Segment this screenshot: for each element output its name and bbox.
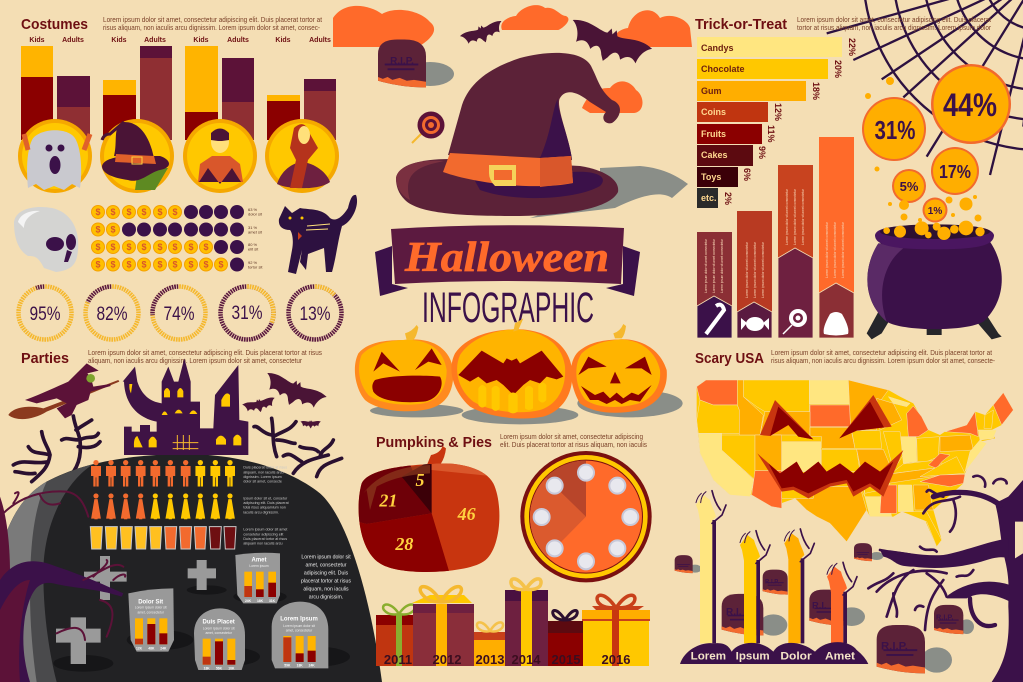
party notes: Duis placerat tortor at risus	[243, 466, 287, 470]
column: candy cane: Lorem ipsum dolor sit amet consectetur	[712, 238, 716, 293]
year labels: 2012	[433, 652, 461, 667]
bar chart: candy: 11%	[766, 125, 776, 143]
donut charts: percentages: 13%	[300, 304, 331, 325]
column: lollipop	[778, 165, 813, 338]
gravestone chart: duis placet: Lorem ipsum dolor sit	[203, 626, 235, 630]
icon: black cat	[279, 195, 357, 274]
pumpkin: grin	[571, 324, 667, 413]
pumpkins description: elit. Duis placerat tortor at risus aliquam, non iaculis	[500, 440, 647, 449]
parties description: aliquam, non iaculis arcu dignissim. Lorem ipsum dolor sit amet, consectetur	[88, 356, 303, 365]
bar chart: candy: Gum	[701, 86, 722, 96]
icon chart: coin rows	[92, 205, 263, 272]
gravestone chart: dolor sit: 48K	[148, 647, 155, 651]
party notes: aliquam non iaculis arcu	[243, 542, 283, 546]
clouds	[333, 5, 692, 113]
pumpkins description	[500, 432, 647, 449]
icon chart: coin rows: $	[188, 260, 194, 270]
pie chart: pumpkin: 21	[378, 491, 397, 511]
bar chart: candy: 22%	[847, 38, 857, 56]
gravestone chart: duis placet: 56K	[216, 667, 223, 671]
gravestone chart: lorem ipsum	[272, 602, 328, 668]
icon: tombstones: R.I.	[812, 600, 827, 610]
bar chart: kids vs adults: Kids	[29, 37, 45, 44]
party notes: dolor sit amet, consecte	[243, 480, 282, 484]
icon chart: coin rows: $	[218, 260, 224, 270]
panel: pumpkins and pies	[350, 432, 652, 667]
year labels: 2013	[476, 652, 504, 667]
bar chart: candy: 18%	[811, 82, 821, 100]
icon chart: coin rows: $	[172, 260, 178, 270]
bar chart: candy: 20%	[833, 60, 843, 78]
bar chart: kids vs adults: Kids	[275, 37, 291, 44]
icon chart: women	[91, 493, 235, 519]
bar chart: candy: 2%	[723, 192, 733, 205]
heading: pumpkins and pies: Pumpkins & Pies	[376, 434, 492, 451]
icon chart: coin rows: dolor sit	[248, 212, 263, 216]
title: Halloween: Halloween	[404, 235, 609, 281]
labels: lorem ipsum dolor amet	[680, 642, 868, 664]
bubble: 5%	[892, 169, 926, 203]
party notes: consetetur adipiscing elit	[243, 532, 283, 536]
pie chart: pumpkin: 46	[457, 504, 476, 524]
icon chart: coin rows: $	[95, 260, 101, 270]
bar chart: candy: Cakes	[701, 150, 728, 160]
castle windows	[129, 384, 241, 450]
pie chart: pumpkin: 28	[394, 534, 413, 554]
centred note: adipiscing elit. Duis	[304, 570, 348, 576]
party notes: Ipsum dolor sit et, consetur	[243, 496, 288, 500]
icon chart: coin rows: $	[95, 242, 101, 252]
gravestone chart: lorem ipsum: 18K	[297, 663, 303, 667]
party notes: total risus aliquamlum non	[243, 506, 286, 510]
labels: lorem ipsum dolor amet: Dolor	[780, 650, 812, 662]
pie chart: pumpkin	[358, 446, 500, 572]
bubble: 1%	[922, 198, 948, 222]
bubble: 44%	[931, 64, 1011, 144]
trick-or-treat description: tortor at risus aliquam, non iaculis arcu dignissim. Lorem ipsum dolor	[797, 23, 992, 32]
year labels: 2015	[552, 652, 580, 667]
gift 2011	[376, 604, 426, 666]
column: cake: Lorem ipsum dolor sit amet consectetur	[825, 221, 829, 278]
gravestone chart: dolor sit: 24K	[160, 647, 167, 651]
icon chart: coin rows: $	[110, 207, 116, 217]
icon: ghost	[18, 119, 92, 193]
party notes	[243, 466, 289, 546]
donut charts: percentages: 95%	[30, 304, 61, 325]
icon chart: coin rows: $	[95, 224, 101, 234]
column: wrapped candy	[737, 211, 772, 338]
subtitle: infographic: INFOGRAPHIC	[422, 284, 594, 332]
trick-or-treat description: Lorem ipsum dolor sit amet, consectetur adipiscing elit. Duis placerat	[797, 15, 991, 24]
title banner	[375, 225, 640, 296]
scary USA description	[771, 348, 996, 365]
centred note: arcu dignissim.	[309, 594, 343, 600]
gifts by year	[376, 579, 650, 667]
column: candy cane: Lorem ipsum dolor sit amet consectetur	[704, 238, 708, 293]
gravestone chart: amet: Amet	[252, 558, 266, 564]
bar chart: candy: etc.	[701, 193, 717, 203]
icon chart: coin rows: $	[141, 207, 147, 217]
column: cake: Lorem ipsum dolor sit amet consectetur	[841, 221, 845, 278]
column: candy cane	[697, 232, 732, 338]
bubble: 17%	[931, 147, 979, 195]
heading: parties: Parties	[21, 350, 69, 367]
pumpkins description: Lorem ipsum dolor sit amet, consectetur adipiscing	[500, 432, 643, 441]
icon chart: coin rows: 80 %	[248, 242, 258, 247]
icon chart: coin rows: 63 %	[248, 207, 258, 212]
icon: pumpkins	[355, 318, 683, 424]
gravestone chart: lorem ipsum: Lorem Ipsum	[280, 616, 318, 622]
trick-or-treat description	[797, 15, 992, 32]
bar chart: kids vs adults: Adults	[309, 37, 331, 44]
icon chart: coin rows: elit sit	[248, 246, 259, 252]
icon chart: coin rows: $	[110, 242, 116, 252]
icon chart: coin rows: $	[188, 242, 194, 252]
heading: costumes: Costumes	[21, 16, 88, 33]
gravestone chart: dolor sit	[128, 588, 174, 652]
costumes description	[103, 15, 322, 32]
icon chart: coin rows: $	[141, 260, 147, 270]
icon: tombstone	[378, 40, 454, 88]
gravestone chart: amet: Lorem ipsum	[249, 564, 269, 568]
parties description: Lorem ipsum dolor sit amet, consectetur adipiscing elit. Duis placerat tortor at risus	[88, 348, 322, 357]
gravestone crosses	[56, 556, 216, 664]
bar chart: candy: Fruits	[701, 129, 726, 139]
pumpkin: angry	[355, 325, 453, 411]
bar chart: candy: Toys	[701, 172, 721, 182]
gift 2016	[582, 595, 650, 666]
icon: cauldron	[867, 221, 1002, 339]
icon: gnarled tree	[868, 476, 1023, 682]
icon: witch	[100, 119, 174, 193]
gift 2015	[548, 610, 583, 666]
icon: foreground tree	[0, 491, 125, 682]
bubble: 31%	[862, 97, 926, 161]
bar chart: kids vs adults: Adults	[144, 37, 166, 44]
icon chart: coin rows: 92 %	[248, 260, 258, 265]
gravestone chart: amet: 24K	[245, 599, 252, 603]
column: cake: Lorem ipsum dolor sit amet consectetur	[833, 221, 837, 278]
gravestone shadows	[53, 585, 350, 672]
icon: tombstones: R.I.P.	[881, 640, 908, 652]
gravestone chart: amet: 18K	[257, 599, 264, 603]
column: wrapped candy: Lorem ipsum dolor sit amet consectetur	[753, 241, 757, 298]
panel: title and hat	[333, 5, 692, 424]
bar chart: kids vs adults: Kids	[111, 37, 127, 44]
bar chart: kids vs adults: Adults	[227, 37, 249, 44]
bar chart: candy: Chocolate	[701, 64, 745, 74]
year labels	[384, 652, 630, 667]
donut charts: percentages: 74%	[164, 304, 195, 325]
icon chart: coin rows: $	[110, 260, 116, 270]
icon: tombstones	[675, 543, 974, 673]
icon: skull	[14, 207, 78, 272]
centred note	[301, 554, 351, 600]
gravestone chart: duis placet: 18K	[204, 667, 210, 671]
panel: trick-or-treat	[695, 0, 1023, 339]
parties description	[88, 348, 322, 365]
labels: lorem ipsum dolor amet: Ipsum	[736, 650, 770, 662]
icon: lollipop	[412, 112, 444, 143]
icon chart: coin rows: $	[157, 242, 163, 252]
party notes: Lorem ipsum dolor sit amet	[243, 528, 287, 532]
bubble: 44%: 44%	[943, 87, 997, 123]
pie chart: pumpkin: 5	[415, 470, 424, 490]
pumpkin: bat face	[451, 318, 572, 418]
icon: masked hero	[183, 119, 257, 193]
bar chart: candy: Coins	[701, 107, 726, 117]
party notes: dignissim. Lorem ipsum	[243, 475, 282, 479]
icon chart: coin rows: $	[95, 207, 101, 217]
year labels: 2014	[512, 652, 541, 667]
party notes: Duis placerat tortor at risus	[243, 537, 287, 541]
column: wrapped candy: Lorem ipsum dolor sit amet consectetur	[761, 241, 765, 298]
gravestone chart: lorem ipsum: Lorem ipsum dolor sit	[283, 624, 315, 628]
small potion bubbles	[865, 77, 982, 222]
heading: trick-or-treat: Trick-or-Treat	[695, 16, 787, 33]
gravestone chart: duis placet: Duis Placet	[203, 620, 235, 626]
column: wrapped candy: Lorem ipsum dolor sit amet consectetur	[745, 241, 749, 298]
icon chart: coin rows: $	[203, 242, 209, 252]
icon: castle	[123, 358, 248, 455]
centred note: aliquam, non iaculis	[303, 586, 349, 592]
heading: scary USA: Scary USA	[695, 350, 764, 367]
hill and party scene	[0, 358, 382, 682]
icon chart: coin rows: $	[126, 207, 132, 217]
bar chart: candy: 6%	[742, 168, 752, 181]
centred note: placerat tortor at risus	[301, 578, 351, 584]
hill	[0, 454, 382, 682]
spider web	[827, 0, 1023, 175]
panel: parties	[0, 348, 382, 682]
party notes: aliquam, non iaculis arcu	[243, 470, 284, 474]
icon chart: coin rows: $	[172, 242, 178, 252]
map of USA with pumpkin face	[697, 380, 1013, 547]
donut charts: percentages	[18, 286, 342, 340]
icon: bats in sky	[459, 15, 654, 75]
bar chart: kids vs adults: Kids	[193, 37, 209, 44]
party notes: adipiscing elit. Duis placerat	[243, 501, 289, 505]
costumes description: Lorem ipsum dolor sit amet, consectetur adipiscing elit. Duis placerat tortor at	[103, 15, 322, 24]
donut charts: percentages: 82%	[96, 304, 128, 325]
gravestone chart: lorem ipsum: 59K	[284, 663, 291, 667]
centred note: Lorem ipsum dolor sit	[301, 554, 351, 560]
icon chart: coin rows: $	[157, 207, 163, 217]
icon: tombstones: R.I.P.	[765, 579, 780, 585]
panel: costumes	[14, 15, 357, 340]
column: lollipop: Lorem ipsum dolor sit amet consectetur	[785, 188, 789, 245]
bubble: 5%: 5%	[900, 179, 919, 194]
year labels: 2016	[602, 652, 630, 667]
icon chart: drinks	[90, 527, 236, 549]
icon: zombie hands	[696, 491, 857, 643]
column: candy cane: Lorem ipsum dolor sit amet consectetur	[720, 238, 724, 293]
icon: witch hat	[396, 53, 688, 218]
gravestone chart: amet	[235, 553, 280, 603]
icon chart: men	[91, 460, 235, 487]
labels: lorem ipsum dolor amet: Amet	[825, 650, 855, 662]
column: cake	[819, 137, 854, 338]
icon chart: coin rows: $	[126, 260, 132, 270]
gravestone chart: lorem ipsum: 24K	[309, 663, 315, 667]
icon chart: coin rows: $	[203, 260, 209, 270]
bubble: 31%: 31%	[874, 115, 916, 145]
centred note: amet, consectetur	[306, 562, 347, 568]
icon chart: coin rows: tortor sit	[248, 264, 263, 270]
gravestone chart: lorem ipsum: amet, consectetur	[286, 629, 313, 633]
panel: scary USA	[675, 348, 1023, 682]
scary USA description: risus aliquam, non iaculis arcu dignissim. Lorem ipsum dolor sit amet, consecte-	[771, 356, 996, 365]
icon: tombstones: R.I.	[726, 607, 742, 618]
gravestone chart: dolor sit: amet, consectetur	[137, 610, 165, 614]
gravestone chart: dolor sit: 12K	[136, 647, 143, 651]
icon: bare trees	[13, 416, 342, 482]
icon chart: coin rows: 31 %	[248, 225, 258, 230]
costumes description: risus aliquam, non iaculis arcu dignissim. Lorem ipsum dolor sit amet, consec-	[103, 23, 321, 32]
icon chart: coin rows: $	[157, 260, 163, 270]
icon chart: coin rows: $	[172, 207, 178, 217]
icon: tombstones: R.I.P.	[936, 612, 953, 621]
gravestone chart: duis placet: amet, consectetur	[205, 631, 233, 635]
bubble: 1%: 1%	[928, 206, 942, 217]
bar chart: kids vs adults	[21, 37, 336, 140]
bubble: 17%: 17%	[939, 162, 971, 182]
icon: witch on broom	[8, 363, 119, 419]
gravestone chart: amet: 31K	[269, 599, 276, 603]
scary USA description: Lorem ipsum dolor sit amet, consectetur adipiscing elit. Duis placerat tortor at	[771, 348, 992, 357]
labels: lorem ipsum dolor amet: Lorem	[691, 650, 726, 662]
icon chart: coin rows: amet sit	[248, 230, 263, 234]
column: lollipop: Lorem ipsum dolor sit amet consectetur	[793, 188, 797, 245]
gift 2012	[412, 587, 474, 666]
pie chart: pie	[520, 451, 652, 582]
gravestone chart: duis placet	[194, 608, 245, 671]
party notes: iaculis arcu dignissim.	[243, 510, 279, 514]
donut charts: percentages: 31%	[232, 303, 263, 324]
gravestone chart: dolor sit: Dolor Sit	[138, 599, 163, 605]
bar chart: candy: 12%	[773, 103, 783, 121]
gravestone chart: dolor sit: Lorem ipsum dolor sit	[135, 606, 167, 610]
gift 2014	[505, 579, 548, 666]
icon chart: coin rows: $	[126, 242, 132, 252]
icon: bats	[242, 369, 328, 428]
icon chart: coin rows: $	[110, 224, 116, 234]
icon: tombstone: R.I.P.	[390, 56, 414, 67]
bar chart: kids vs adults: Adults	[62, 37, 84, 44]
bar chart: candy: Candys	[701, 43, 734, 53]
year labels: 2011	[384, 652, 412, 667]
icon chart: coin rows: $	[141, 242, 147, 252]
gift 2013	[474, 622, 506, 666]
gravestone chart: duis placet: 10K	[228, 667, 235, 671]
bar chart: candy: 9%	[757, 146, 767, 159]
bar chart: candy	[697, 37, 857, 208]
column: lollipop: Lorem ipsum dolor sit amet consectetur	[801, 188, 805, 245]
icon: vampire woman	[265, 119, 339, 193]
